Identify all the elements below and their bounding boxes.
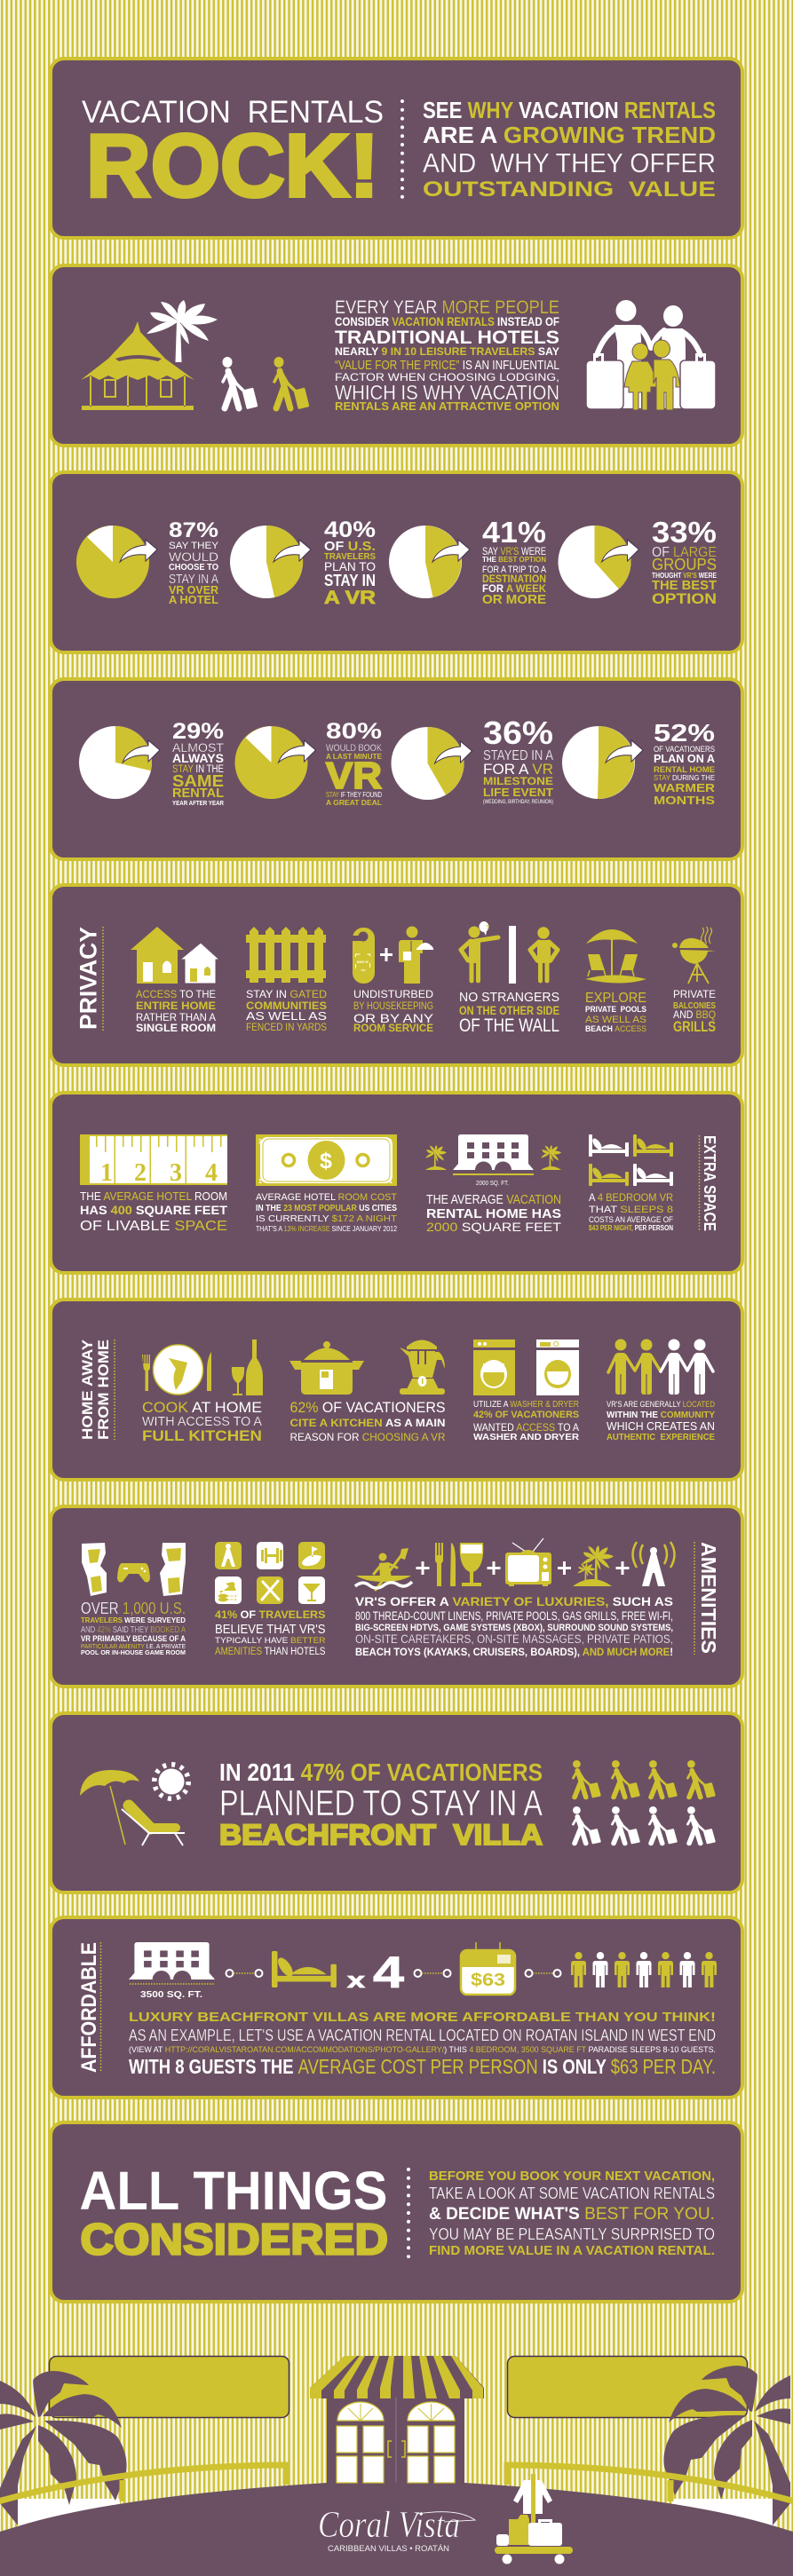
text: cook at home: WITH ACCESS TO A	[142, 1415, 262, 1429]
stat 29%: ALWAYS	[172, 751, 224, 765]
icon: plus	[416, 1561, 430, 1575]
pie 80%	[234, 726, 316, 799]
text: affordable: (VIEW AT HTTP://CORALVISTAROATAN.COM/ACCOMMODATIONS/PHOTO-GALLERY/) THIS 4 BEDROOM, 3500 SQUARE FT PARADISE SLEEPS 8-10 GUESTS.	[129, 2045, 716, 2055]
pie 40%	[230, 525, 311, 598]
panel: affordable	[51, 1917, 742, 2098]
icon: villa 3500 sq ft	[129, 1942, 215, 2000]
logo: Coral Vista: Coral Vista	[318, 2505, 460, 2546]
stat 52%: OF VACATIONERS	[654, 745, 715, 755]
icon: wifi tower	[632, 1542, 675, 1586]
stat 36%: STAYED IN A	[483, 748, 554, 763]
palm left	[0, 2371, 127, 2525]
icon: houses	[131, 927, 219, 984]
subtitle	[423, 97, 716, 201]
heading: amenities: AMENITIES	[697, 1542, 720, 1654]
icon: hut	[81, 321, 194, 410]
stat 36%: MILESTONE	[483, 775, 553, 787]
icon: arcade machines and controller	[82, 1543, 186, 1596]
sign left	[50, 2356, 289, 2418]
amenity icon tiles	[215, 1542, 325, 1604]
text: affordable	[129, 2010, 716, 2078]
text: 62%: CITE A KITCHEN AS A MAIN	[289, 1417, 446, 1429]
panel: statistics row 1	[51, 472, 742, 652]
text: balconies: GRILLS	[673, 1018, 716, 1035]
text: better amenities: AMENITIES THAN HOTELS	[215, 1647, 326, 1657]
stat 36%: FOR A VR	[483, 762, 553, 778]
text block: TRADITIONAL HOTELS	[335, 328, 559, 348]
building	[327, 2398, 464, 2484]
heading: home away from home	[79, 1339, 112, 1440]
text: survey: OVER 1,000 U.S.	[81, 1600, 186, 1617]
stat 87%: A HOTEL	[169, 594, 218, 606]
text: no strangers: NO STRANGERS	[459, 990, 559, 1005]
text: no strangers: OF THE WALL	[459, 1015, 559, 1036]
icon: neighbour pointing and wall	[461, 921, 558, 984]
stat 40%: OF U.S.	[324, 539, 376, 554]
panel: amenities	[51, 1506, 742, 1687]
text: survey: POOL OR IN-HOUSE GAME ROOM	[81, 1648, 186, 1656]
stat 80%	[326, 719, 383, 807]
stat 36%: LIFE EVENT	[483, 786, 553, 799]
palm right	[663, 2366, 790, 2525]
text: entire home: RATHER THAN A	[136, 1011, 216, 1023]
stat 80%: A GREAT DEAL	[326, 798, 382, 807]
text block: RENTALS ARE AN ATTRACTIVE OPTION	[335, 400, 559, 413]
icon: bed	[272, 1951, 337, 1987]
stat 87%: 87%	[169, 518, 218, 542]
icon: plus	[558, 1561, 571, 1575]
text: community	[607, 1400, 715, 1442]
text: vacation rental home	[426, 1193, 562, 1234]
text: gated communities	[246, 988, 327, 1033]
icon: walker white	[222, 357, 258, 409]
text: entire home	[136, 988, 216, 1034]
icon: sun	[155, 1765, 188, 1798]
icon: banknote: 1	[258, 1139, 262, 1145]
text: gated communities: AS WELL AS	[246, 1010, 327, 1023]
icon: yellow travellers	[573, 1760, 716, 1798]
text: washer and dryer: WANTED ACCESS TO A	[473, 1421, 579, 1434]
awning	[310, 2356, 484, 2398]
stat 40%	[324, 518, 376, 608]
stat 40%: STAY IN	[324, 572, 376, 589]
icon: plus	[616, 1561, 629, 1575]
text: washer and dryer: WASHER AND DRYER	[473, 1432, 579, 1442]
text: explore	[585, 991, 646, 1034]
stat 52%: STAY DURING THE	[654, 773, 715, 782]
text: cook at home: FULL KITCHEN	[142, 1427, 262, 1444]
pie 33%	[558, 525, 639, 598]
icon: fence	[246, 927, 326, 983]
stat 33%: OPTION	[652, 590, 717, 607]
icon: calendar $63: $63	[471, 1971, 505, 1990]
text: luxuries: VR'S OFFER A VARIETY OF LUXURIES, SUCH AS	[355, 1595, 673, 1608]
icon: seven guests	[571, 1952, 717, 1987]
text: affordable: WITH 8 GUESTS THE AVERAGE COST PER PERSON IS ONLY $63 PER DAY.	[129, 2055, 716, 2078]
icon: plus	[487, 1561, 501, 1575]
text: hotel room: HAS 400 SQUARE FEET	[80, 1203, 227, 1217]
heading: home away from home: FROM HOME	[95, 1339, 112, 1440]
heading: affordable: AFFORDABLE	[77, 1942, 101, 2073]
pie 41%	[389, 525, 470, 598]
text: closing advice	[429, 2169, 715, 2258]
icon: pot	[289, 1341, 364, 1395]
pie 87%	[76, 525, 157, 598]
text: survey	[81, 1600, 186, 1656]
icon: cutlery and wine glass	[435, 1543, 483, 1586]
panel: extra space	[51, 1093, 742, 1273]
subtitle: AND WHY THEY OFFER	[423, 147, 716, 178]
text: vacation rental home: RENTAL HOME HAS	[426, 1207, 561, 1221]
text: four bedroom: THAT SLEEPS 8	[589, 1205, 673, 1215]
stat 80%: WOULD BOOK	[326, 743, 383, 754]
text: beachfront villa: BEACHFRONT VILLA	[219, 1819, 543, 1851]
text: balconies	[673, 990, 716, 1035]
text: survey: PARTICULAR AMENITY I.E. A PRIVATE	[81, 1644, 186, 1650]
sign right	[508, 2356, 748, 2418]
stat 80%: 80%	[326, 719, 382, 744]
connector	[226, 1970, 263, 1977]
text: vacation rental home: 2000 SQUARE FEET	[426, 1220, 562, 1234]
text: community: AUTHENTIC EXPERIENCE	[607, 1433, 715, 1442]
panel: home away from home	[51, 1300, 742, 1480]
icon: beach umbrella and chairs	[585, 929, 646, 984]
railing right	[507, 2465, 793, 2501]
divider dots	[407, 2169, 410, 2256]
pie 29%	[79, 726, 160, 799]
icon: white travellers	[573, 1806, 716, 1845]
text: closing advice: TAKE A LOOK AT SOME VACATION RENTALS	[429, 2185, 715, 2202]
text: luxuries: BEACH TOYS (KAYAKS, CRUISERS, BOARDS), AND MUCH MORE!	[355, 1648, 673, 1658]
white beach right	[672, 2499, 778, 2526]
text: community: VR'S ARE GENERALLY LOCATED	[607, 1400, 715, 1410]
connector	[414, 1970, 451, 1977]
stat 41%: OR MORE	[482, 592, 546, 607]
text: hotel room: OF LIVABLE SPACE	[80, 1219, 227, 1234]
pie 36%	[391, 727, 472, 800]
text: better amenities: BELIEVE THAT VR'S	[215, 1622, 325, 1637]
subtitle: OUTSTANDING VALUE	[423, 178, 716, 201]
icon: people holding hands	[608, 1339, 713, 1395]
text: room cost: THAT'S A 13% INCREASE SINCE JANUARY 2012	[256, 1225, 397, 1233]
stat 29%: STAY IN THE	[172, 764, 224, 775]
text: gated communities: FENCED IN YARDS	[246, 1021, 327, 1033]
heading: privacy: PRIVACY	[75, 927, 101, 1030]
text: undisturbed: UNDISTURBED	[353, 988, 433, 1000]
panel: beachfront	[51, 1713, 742, 1892]
text: balconies: AND BBQ	[673, 1010, 716, 1021]
text: explore: PRIVATE POOLS	[585, 1005, 646, 1014]
text block: CONSIDER VACATION RENTALS INSTEAD OF	[335, 314, 559, 328]
text: room cost	[256, 1192, 397, 1233]
text: survey: VR PRIMARILY BECAUSE OF A	[81, 1634, 186, 1643]
icon: neighbour pointing and wall: ?	[486, 925, 489, 931]
text: entire home: ACCESS TO THE	[136, 988, 216, 1000]
icon: door hanger	[352, 928, 375, 984]
text: washer and dryer: UTILIZE A WASHER & DRYER	[473, 1400, 579, 1410]
title: rock: ROCK!	[86, 116, 379, 216]
icon: walker yellow	[274, 357, 309, 409]
stat 36%: (WEDDING, BIRTHDAY, REUNION)	[483, 800, 553, 805]
text: beachfront villa	[219, 1758, 543, 1851]
icon: villa 3500 sq ft: 3500 SQ. FT.	[140, 1990, 202, 2000]
panel: statistics row 2	[51, 679, 742, 859]
icon: hotel with palms	[425, 1134, 561, 1187]
subtitle: ARE A GROWING TREND	[423, 122, 716, 148]
text: luxuries	[355, 1595, 673, 1658]
heading: home away from home: HOME AWAY	[79, 1339, 96, 1440]
stat 33%: GROUPS	[652, 556, 717, 573]
stat 36%: 36%	[483, 715, 553, 751]
text: entire home: ENTIRE HOME	[136, 1000, 216, 1012]
text: 62%: 62% OF VACATIONERS	[289, 1399, 446, 1416]
icon: family	[586, 300, 716, 410]
text: room cost: AVERAGE HOTEL ROOM COST	[256, 1192, 397, 1203]
text: no strangers	[459, 990, 559, 1036]
icon: lounge chair	[122, 1806, 185, 1845]
storefront	[310, 2356, 484, 2484]
stat 41%: FOR A TRIP TO A	[482, 565, 547, 575]
text: four bedroom: $43 PER NIGHT, PER PERSON	[589, 1224, 673, 1232]
text: hotel room: THE AVERAGE HOTEL ROOM	[80, 1190, 227, 1203]
icon: television	[505, 1538, 551, 1586]
icon: blender	[400, 1340, 445, 1395]
stat 87%	[169, 518, 219, 606]
icon: dryer	[536, 1339, 579, 1395]
text: balconies: PRIVATE	[673, 990, 716, 1000]
stat 52%	[654, 719, 716, 807]
panel: every year	[51, 265, 742, 446]
stat 52%: MONTHS	[654, 794, 715, 807]
stat 41%: 41%	[482, 516, 546, 549]
icon: banknote: 1	[389, 1139, 393, 1145]
icon: ruler: 2	[134, 1159, 147, 1187]
stat 80%: A LAST MINUTE	[326, 752, 382, 761]
text: four bedroom	[589, 1191, 673, 1232]
footer scene	[0, 2356, 793, 2576]
stat 33%: THE BEST	[652, 578, 717, 593]
icon: ruler	[80, 1134, 227, 1187]
stat 29%: RENTAL	[172, 786, 224, 801]
text block	[335, 297, 559, 413]
stat 41%: FOR A WEEK	[482, 584, 547, 595]
stat 87%: VR OVER	[169, 583, 219, 597]
stat 33%: 33%	[652, 516, 717, 549]
text: better amenities: 41% OF TRAVELERS	[215, 1608, 325, 1621]
text: cook at home	[142, 1399, 262, 1444]
stat 87%: SAY THEY	[169, 541, 219, 551]
text: balconies: BALCONIES	[673, 1000, 716, 1011]
text: better amenities	[215, 1608, 326, 1657]
stat 41%: SAY VR'S WERE	[482, 547, 546, 557]
icon: palm	[147, 300, 218, 362]
stat 41%	[482, 516, 547, 607]
text: explore: BEACH ACCESS	[585, 1024, 646, 1034]
panel: privacy	[51, 885, 742, 1065]
text: gated communities: STAY IN GATED	[246, 988, 327, 1000]
pie 52%	[562, 726, 643, 799]
text: no strangers: ON THE OTHER SIDE	[459, 1003, 559, 1017]
stat 33%	[652, 516, 718, 607]
icon: door hanger: MAKE UP	[357, 960, 369, 964]
stat 29%	[172, 719, 224, 807]
text: explore: EXPLORE	[585, 991, 646, 1006]
stat 40%: TRAVELERS	[324, 551, 376, 562]
icon: four beds	[589, 1134, 673, 1186]
stat 41%: DESTINATION	[482, 574, 546, 585]
logo: Coral Vista: CARIBBEAN VILLAS • ROATÁN	[328, 2544, 449, 2554]
title: vacation rentals: VACATION RENTALS	[82, 95, 384, 130]
text: x 4: 4	[373, 1948, 404, 1997]
stat 80%: STAY IF THEY FOUND	[326, 791, 382, 799]
text: gated communities: COMMUNITIES	[246, 1001, 327, 1012]
stat 87%: WOULD	[169, 549, 218, 564]
text: vacation rental home: THE AVERAGE VACATION	[426, 1193, 561, 1207]
stat 29%: SAME	[172, 772, 224, 790]
icon: calendar $63	[461, 1942, 515, 1995]
text: x 4: x	[347, 1969, 366, 1993]
panel: all things considered	[51, 2122, 742, 2302]
stat 80%: VR	[326, 755, 382, 796]
icon: ruler: 1	[100, 1159, 113, 1187]
stat 52%: RENTAL HOME	[654, 765, 715, 775]
ground	[0, 2483, 793, 2576]
text: beachfront villa: PLANNED TO STAY IN A	[219, 1782, 543, 1823]
text: room cost: IS CURRENTLY $172 A NIGHT	[256, 1214, 397, 1224]
text: 62%	[289, 1399, 446, 1443]
icon: ruler: 4	[205, 1159, 218, 1187]
text: x 4	[347, 1948, 404, 1997]
icon: banknote: 1	[258, 1179, 262, 1185]
white beach left	[15, 2499, 120, 2526]
icon: washer	[473, 1339, 515, 1395]
icon: banknote: 1	[389, 1179, 393, 1185]
stat 87%: STAY IN A	[169, 572, 218, 587]
divider dots	[400, 101, 404, 197]
text: undisturbed: ROOM SERVICE	[353, 1023, 433, 1034]
text: community: WHICH CREATES AN	[607, 1419, 715, 1433]
heading: all things: ALL THINGS	[80, 2161, 387, 2221]
text block: NEARLY 9 IN 10 LEISURE TRAVELERS SAY	[335, 347, 559, 358]
text: room cost: IN THE 23 MOST POPULAR US CITIES	[256, 1203, 397, 1213]
stat 41%: THE BEST OPTION	[482, 555, 546, 564]
text: washer and dryer: 42% OF VACATIONERS	[473, 1410, 579, 1420]
text block: WHICH IS WHY VACATION	[335, 381, 559, 404]
text: undisturbed: BY HOUSEKEEPING	[353, 1000, 433, 1012]
text: luxuries: 800 THREAD-COUNT LINENS, PRIVATE POOLS, GAS GRILLS, FREE WI-FI,	[355, 1609, 673, 1623]
text: washer and dryer	[473, 1400, 579, 1442]
doors	[337, 2402, 455, 2483]
stat 87%: CHOOSE TO	[169, 563, 218, 573]
text: community: WITHIN THE COMMUNITY	[607, 1410, 715, 1420]
stat 29%: 29%	[172, 719, 224, 744]
icon: umbrella	[80, 1770, 139, 1845]
stat 33%: THOUGHT VR'S WERE	[652, 572, 718, 580]
text: hotel room	[80, 1190, 227, 1234]
icon: palm island	[573, 1545, 614, 1586]
connector	[526, 1970, 561, 1977]
stat 52%: PLAN ON A	[654, 753, 715, 765]
text: undisturbed	[353, 988, 434, 1034]
stat 29%: ALMOST	[172, 740, 224, 755]
icon: waiter	[399, 927, 433, 984]
text: better amenities: TYPICALLY HAVE BETTER	[215, 1636, 326, 1646]
panel: title	[51, 59, 742, 238]
text: four bedroom: COSTS AN AVERAGE OF	[589, 1215, 673, 1225]
text: luxuries: BIG-SCREEN HDTVS, GAME SYSTEMS (XBOX), SURROUND SOUND SYSTEMS,	[355, 1623, 673, 1633]
text: cook at home: COOK AT HOME	[142, 1399, 262, 1416]
railing left	[0, 2465, 286, 2501]
icon: kayak paddler	[355, 1548, 412, 1590]
icon: banknote: $	[320, 1149, 332, 1173]
stat 40%: A VR	[324, 588, 376, 608]
text: explore: AS WELL AS	[585, 1015, 646, 1025]
icon: luggage cart	[495, 2474, 573, 2564]
text: closing advice: YOU MAY BE PLEASANTLY SURPRISED TO	[429, 2225, 715, 2243]
text: four bedroom: A 4 BEDROOM VR	[589, 1191, 673, 1204]
text: closing advice: BEFORE YOU BOOK YOUR NEXT VACATION,	[429, 2169, 715, 2184]
icon: grill	[672, 927, 716, 984]
text: survey: TRAVELERS WERE SURVEYED	[81, 1616, 186, 1624]
stat 52%: 52%	[654, 719, 715, 747]
stat 29%: YEAR AFTER YEAR	[172, 799, 224, 807]
text block: EVERY YEAR MORE PEOPLE	[335, 297, 559, 318]
heading: extra space: EXTRA SPACE	[701, 1135, 718, 1231]
stat 40%: PLAN TO	[324, 559, 376, 573]
icon: ruler: 3	[170, 1159, 182, 1187]
icon: banknote	[256, 1134, 397, 1186]
icon: plus	[380, 948, 393, 961]
icon: plate with cutlery and wine	[142, 1339, 263, 1395]
text: undisturbed: OR BY ANY	[353, 1011, 434, 1025]
subtitle: SEE WHY VACATION RENTALS	[423, 97, 716, 123]
text: 62%: REASON FOR CHOOSING A VR	[289, 1431, 446, 1443]
text: closing advice: FIND MORE VALUE IN A VACATION RENTAL.	[429, 2244, 715, 2258]
stat 40%: 40%	[324, 518, 376, 542]
text: affordable: LUXURY BEACHFRONT VILLAS ARE MORE AFFORDABLE THAN YOU THINK!	[129, 2010, 716, 2025]
icon: hotel with palms: 2000 SQ. FT.	[476, 1181, 509, 1187]
text: beachfront villa: IN 2011 47% OF VACATIONERS	[219, 1758, 543, 1786]
text: closing advice: & DECIDE WHAT'S BEST FOR YOU.	[429, 2205, 715, 2224]
text block: FACTOR WHEN CHOOSING LODGING,	[335, 371, 559, 383]
stat 52%: WARMER	[654, 781, 716, 794]
text: survey: AND 42% SAID THEY BOOKED A	[81, 1625, 186, 1635]
stat 36%	[483, 715, 554, 805]
text block: “VALUE FOR THE PRICE” IS AN INFLUENTIAL	[335, 358, 559, 373]
text: luxuries: ON-SITE CARETAKERS, ON-SITE MASSAGES, PRIVATE PATIOS,	[355, 1632, 673, 1646]
stat 33%: OF LARGE	[652, 545, 717, 560]
text: entire home: SINGLE ROOM	[136, 1022, 216, 1034]
heading: considered: CONSIDERED	[80, 2216, 388, 2264]
